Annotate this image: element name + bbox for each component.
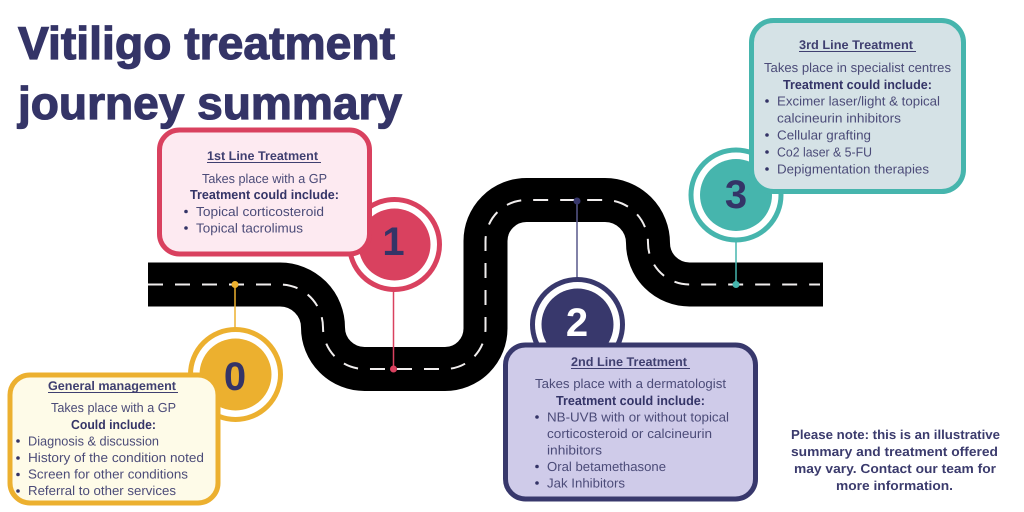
text: 3rd line body: Co2 laser & 5-FU xyxy=(777,144,872,160)
text: general management body xyxy=(16,400,204,498)
text: 1st line body: Topical corticosteroid xyxy=(196,204,324,219)
panel: general management xyxy=(10,375,218,503)
text: 3rd line body: calcineurin inhibitors xyxy=(777,110,902,126)
text: 2nd line body: corticosteroid or calcineurin xyxy=(547,426,712,441)
connector 0 xyxy=(232,281,238,330)
heading: general management: General management xyxy=(48,379,177,393)
text: 3rd line body: Takes place in specialist centres xyxy=(764,60,952,75)
text: general management body: History of the condition noted xyxy=(28,450,204,465)
text: 1st line body: Treatment could include: xyxy=(190,187,339,202)
note: Please note: this is an illustrative xyxy=(791,427,1000,442)
note: summary and treatment offered xyxy=(791,444,998,459)
text: 2nd line body: Jak Inhibitors xyxy=(547,476,626,490)
text: general management body: Could include: xyxy=(71,417,156,432)
badge 3 xyxy=(691,150,781,240)
text: 3rd line body: Treatment could include: xyxy=(783,77,932,92)
text: 3rd line body: Excimer laser/light & topical xyxy=(777,94,940,108)
connector 3 xyxy=(732,240,740,288)
text: 1st line body xyxy=(184,171,339,236)
text: 3rd line body: Depigmentation therapies xyxy=(777,162,930,176)
text: 2nd line body xyxy=(535,376,729,490)
note xyxy=(791,427,1000,493)
title: Vitiligo treatment xyxy=(18,17,395,69)
badge 0 xyxy=(190,330,280,420)
text: 1st line body: Topical tacrolimus xyxy=(196,220,304,236)
badge 1 xyxy=(350,200,440,290)
text: 2nd line body: Takes place with a dermatologist xyxy=(535,376,726,391)
text: general management body: Referral to other services xyxy=(28,483,176,498)
heading: 3rd line: 3rd Line Treatment xyxy=(799,38,914,52)
panel: 2nd line xyxy=(506,345,756,499)
text: general management body: Screen for other conditions xyxy=(28,466,189,482)
text: general management body: Takes place with a GP xyxy=(51,400,176,415)
badge 0: 0 xyxy=(224,355,246,399)
road xyxy=(148,200,823,369)
note: may vary. Contact our team for xyxy=(794,461,996,476)
text: 1st line body: Takes place with a GP xyxy=(202,171,327,186)
text: 2nd line body: inhibitors xyxy=(547,442,603,458)
connector 1 xyxy=(390,290,397,372)
title xyxy=(17,17,402,129)
heading: 1st line: 1st Line Treatment xyxy=(207,149,319,163)
heading: 2nd line: 2nd Line Treatment xyxy=(571,355,688,369)
text: 3rd line body: Cellular grafting xyxy=(777,128,871,142)
panel: 3rd line xyxy=(752,20,964,192)
text: 2nd line body: Treatment could include: xyxy=(556,393,705,408)
title: journey summary xyxy=(17,77,402,129)
badge 2 xyxy=(532,280,622,370)
text: 3rd line body xyxy=(764,60,952,176)
text: 2nd line body: Oral betamethasone xyxy=(547,459,666,474)
text: 2nd line body: NB-UVB with or without topical xyxy=(547,410,729,424)
badge 1: 1 xyxy=(382,220,405,264)
connector 2 xyxy=(574,198,580,280)
panel: 1st line xyxy=(160,130,370,254)
badge 2: 2 xyxy=(566,301,588,345)
text: general management body: Diagnosis & discussion xyxy=(28,434,159,448)
note: more information. xyxy=(836,478,953,493)
badge 3: 3 xyxy=(725,173,747,217)
